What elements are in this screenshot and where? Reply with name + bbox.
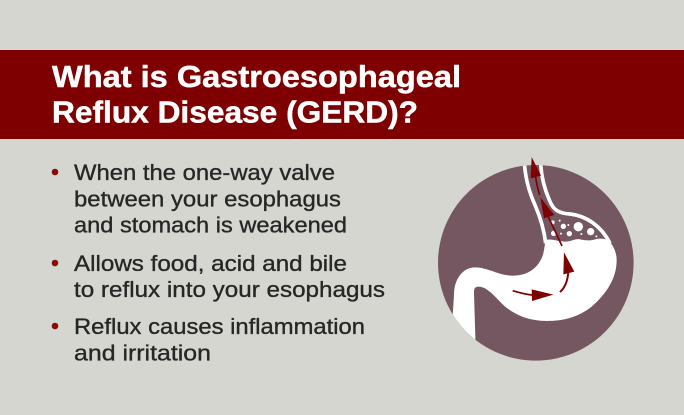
bullet: reflux of food, acid and bile: to reflux into your esophagus	[74, 277, 385, 302]
bullet: weakened valve: and stomach is weakened	[74, 212, 347, 238]
bullet: inflammation	[52, 314, 365, 366]
gas bubbles	[551, 220, 597, 237]
stomach illustration	[438, 157, 634, 361]
stomach body	[452, 238, 617, 340]
bullet: weakened valve: between your esophagus	[74, 186, 341, 212]
bullet: inflammation: and irritation	[74, 340, 211, 366]
title banner	[0, 50, 684, 139]
bullet: weakened valve	[52, 160, 347, 238]
bullet: reflux of food, acid and bile: Allows food, acid and bile	[74, 251, 347, 276]
bullet: weakened valve: When the one-way valve	[74, 160, 335, 185]
bullet: reflux of food, acid and bile	[52, 251, 385, 302]
title banner: What is Gastroesophageal	[52, 59, 461, 94]
esophagus and fundus wall	[524, 163, 546, 243]
title banner: Reflux Disease (GERD)?	[52, 95, 418, 130]
bullet: inflammation: Reflux causes inflammation	[74, 314, 365, 339]
reflux arrows	[513, 157, 574, 301]
